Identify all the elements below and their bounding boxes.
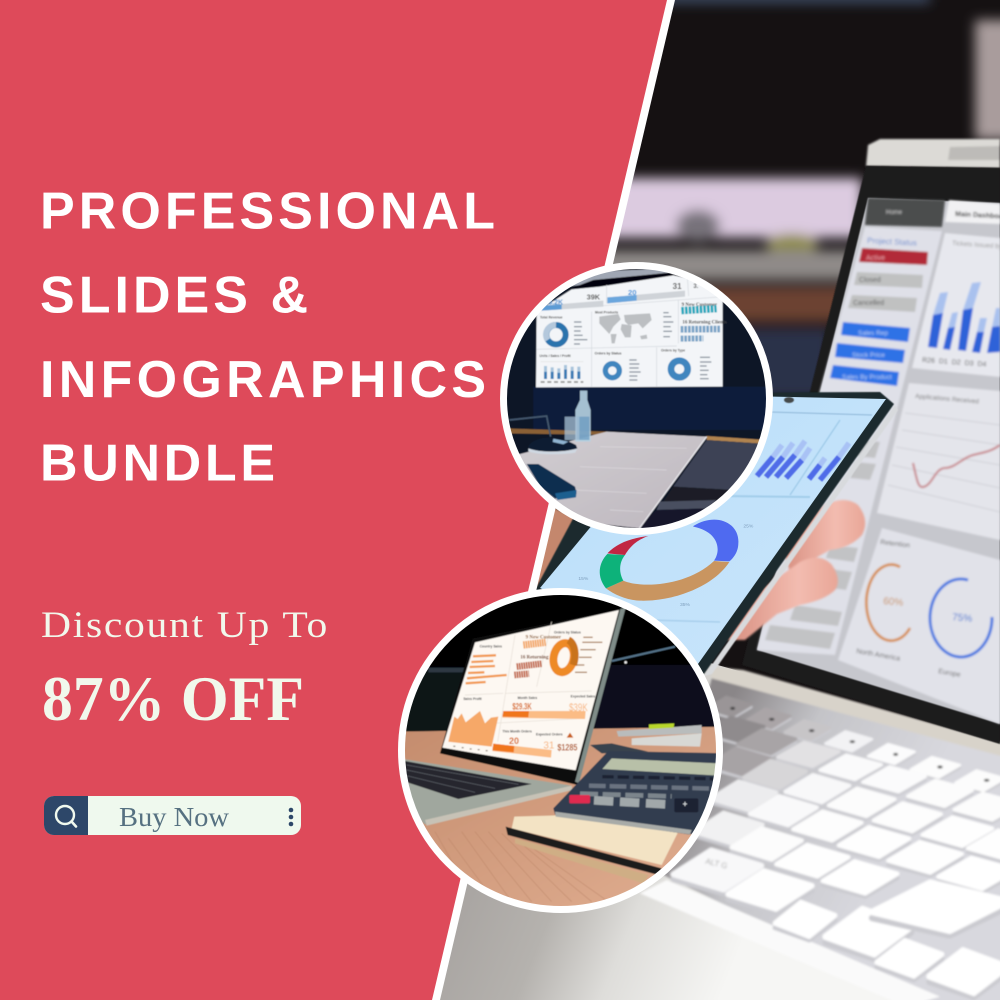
circle photo content: Total Revenue <box>540 316 563 320</box>
key glyph marks <box>730 707 989 782</box>
menu dots <box>289 808 293 826</box>
tablet on table <box>527 464 577 499</box>
front rim <box>640 880 940 1000</box>
bottom row and space bar <box>673 850 1000 997</box>
title <box>40 182 495 492</box>
phone camera <box>784 397 794 403</box>
phone donut chart <box>578 520 754 608</box>
panel: retention gauges: 75% <box>952 612 973 625</box>
circle white ring <box>402 592 720 910</box>
KPI tiles: 31 <box>673 282 682 291</box>
laptop <box>742 139 1000 744</box>
laptop deck <box>395 758 572 824</box>
circle photo content: Expected Orders <box>536 733 563 737</box>
circle photo content: $29.3K <box>512 702 532 712</box>
laptop lid <box>866 139 1000 168</box>
KPI bars <box>502 711 586 719</box>
line dividers <box>465 622 592 742</box>
panel: retention gauges: Retention <box>880 539 910 550</box>
laptop keyboard <box>405 761 532 799</box>
circle photo content: Sales Profit <box>463 697 483 701</box>
orange dashboard screen <box>442 610 619 770</box>
panel: retention gauges: Europe <box>938 668 961 679</box>
panel: tickets bar chart <box>912 233 1000 377</box>
office wall background <box>595 664 714 728</box>
keyboard keys: ALT G <box>705 857 728 871</box>
panel: applications line chart <box>877 383 1000 540</box>
laptop bezel <box>742 166 1000 744</box>
sidebar buttons: Cancelled <box>853 300 884 307</box>
middle letter row <box>710 781 1000 892</box>
hand holding phone <box>532 500 865 640</box>
circle photo content: 20 <box>509 736 519 746</box>
circle white ring <box>504 266 770 532</box>
circle photo content: $1285 <box>557 743 577 753</box>
sidebar buttons: Stock Price <box>852 352 885 359</box>
conference device <box>509 416 551 437</box>
title line 1: PROFESSIONAL <box>40 182 495 240</box>
horizontal orange bars <box>466 655 507 683</box>
donut: orders by status: Orders by Status <box>595 352 622 356</box>
area chart <box>448 711 498 747</box>
title line 3: INFOGRAPHICS <box>40 351 486 409</box>
keyboard deck <box>400 660 1000 1000</box>
phone donut chart: 35% <box>680 602 691 608</box>
phone <box>530 390 900 680</box>
sidebar buttons: Sales Rep <box>858 330 888 337</box>
circle photo content: $39K <box>569 702 588 714</box>
number row <box>706 717 1000 822</box>
calculator keys <box>580 777 728 804</box>
panel: retention gauges: 60% <box>883 596 904 609</box>
bar chart: units sales profit: Units / Sales / Profit <box>539 354 571 358</box>
KPI tiles: 3.2K <box>548 300 563 307</box>
phone donut chart: 15% <box>578 576 589 582</box>
sidebar buttons: Sales By Product <box>842 374 892 381</box>
people icons: 9 New Customer <box>682 303 718 308</box>
laptop bezel and screen <box>440 608 626 785</box>
blurred office backdrop <box>430 0 1000 1000</box>
button label: Buy Now <box>119 802 230 832</box>
KPI tiles: 20 <box>628 288 637 297</box>
phone bar chart <box>757 441 849 480</box>
sidebar buttons: Project Status <box>867 236 917 248</box>
wooden wall trim <box>507 428 607 435</box>
water bottle and glass <box>575 391 591 442</box>
KPI tiles <box>542 282 699 311</box>
red diagonal panel <box>0 0 667 1000</box>
people pictograms: 9 New Customer <box>526 635 562 640</box>
button background <box>44 796 301 835</box>
circle photo content: This Month Orders <box>502 729 532 733</box>
KPI tiles: 3. <box>693 284 699 290</box>
panel: tickets bar chart: R26 D1 D2 D3 D4 <box>922 357 987 368</box>
circle photo content <box>507 269 766 528</box>
photo circle: conference room wall dashboard <box>500 260 777 537</box>
discount amount: 87% OFF <box>42 664 304 734</box>
circle photo content <box>405 595 716 906</box>
panel: retention gauges: North America <box>856 648 901 663</box>
circle photo content: Most Products <box>595 311 618 315</box>
calculator: + <box>683 799 688 808</box>
sidebar buttons: Active <box>866 255 885 262</box>
discount label: Discount Up To <box>41 605 329 646</box>
dashboard header <box>865 198 1000 227</box>
panel: retention gauges <box>838 528 1000 724</box>
phone donut chart: 25% <box>743 524 754 530</box>
calculator <box>553 751 728 834</box>
desk wood <box>405 726 716 906</box>
buy now button <box>44 796 301 835</box>
laptop screen <box>757 198 1000 724</box>
keyboard keys <box>673 697 1000 997</box>
function keys <box>707 697 1000 793</box>
lower letter row <box>694 813 897 897</box>
white diagonal stripe <box>425 0 675 1000</box>
circle photo content: Expected Sales <box>571 694 595 698</box>
wall screen <box>536 275 723 387</box>
KPI tiles: 39K <box>587 293 601 302</box>
search icon tab <box>44 796 88 835</box>
phone screen <box>540 396 886 664</box>
papers on desk <box>617 725 702 737</box>
sidebar buttons: Closed <box>859 277 881 284</box>
circle photo content: 16 Returning <box>520 655 549 660</box>
sidebar buttons <box>757 227 942 655</box>
donut: orders by type: Orders by Type <box>661 349 685 353</box>
conference table <box>510 432 707 528</box>
circle photo content: Country Sales <box>480 645 502 649</box>
phone body <box>535 392 894 674</box>
background photo: laptop and phone dashboard <box>400 0 1000 1000</box>
donut: total revenue <box>546 325 566 344</box>
world map <box>599 313 652 343</box>
panel: applications line chart: Applications Received <box>915 393 980 406</box>
photo circle: laptop with orange dashboard and calculator <box>395 585 728 918</box>
circle photo content: 16 Returning Clients <box>682 320 727 325</box>
upper letter row <box>709 748 1000 862</box>
circle photo content: 31 <box>543 740 555 751</box>
orange donut: Orders by Status <box>554 630 581 634</box>
notebook <box>511 815 678 866</box>
circle photo content: Month Sales <box>518 696 537 700</box>
keyboard top band <box>640 667 1000 1000</box>
title line 2: SLIDES & <box>40 266 308 324</box>
title line 4: BUNDLE <box>40 434 275 492</box>
dashboard header: Home <box>886 210 903 216</box>
